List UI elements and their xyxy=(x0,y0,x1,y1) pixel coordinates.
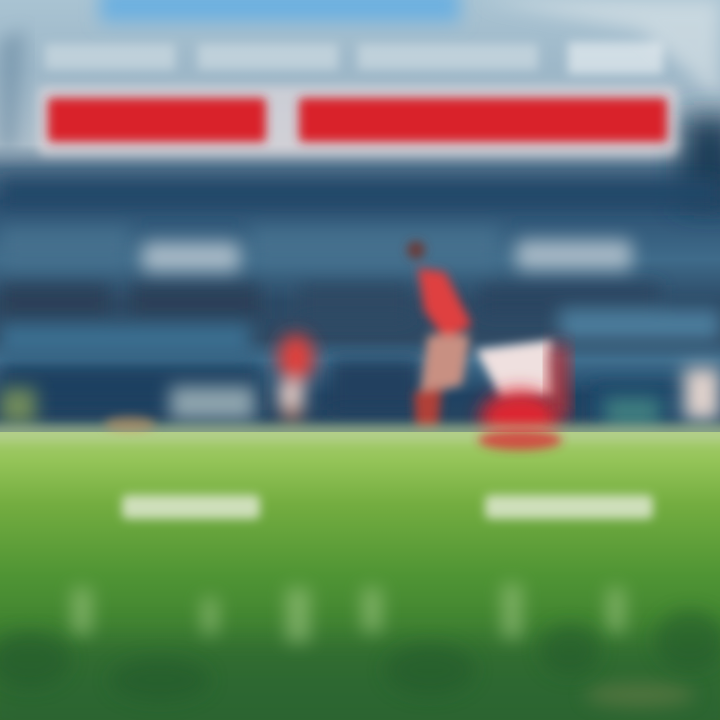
player right xyxy=(407,241,568,446)
stand tiers xyxy=(0,180,720,425)
title line (illegible, pale) xyxy=(45,42,663,74)
player left xyxy=(278,334,314,422)
lower right label xyxy=(485,495,653,519)
lower left label xyxy=(122,495,260,519)
upper right label xyxy=(516,240,632,270)
foreground dark grass mottling xyxy=(0,610,720,702)
upper left label xyxy=(142,242,240,272)
red title banner xyxy=(38,86,678,156)
foreground grass blades xyxy=(72,584,625,642)
distant left figures xyxy=(0,368,720,426)
pitch xyxy=(0,416,720,720)
